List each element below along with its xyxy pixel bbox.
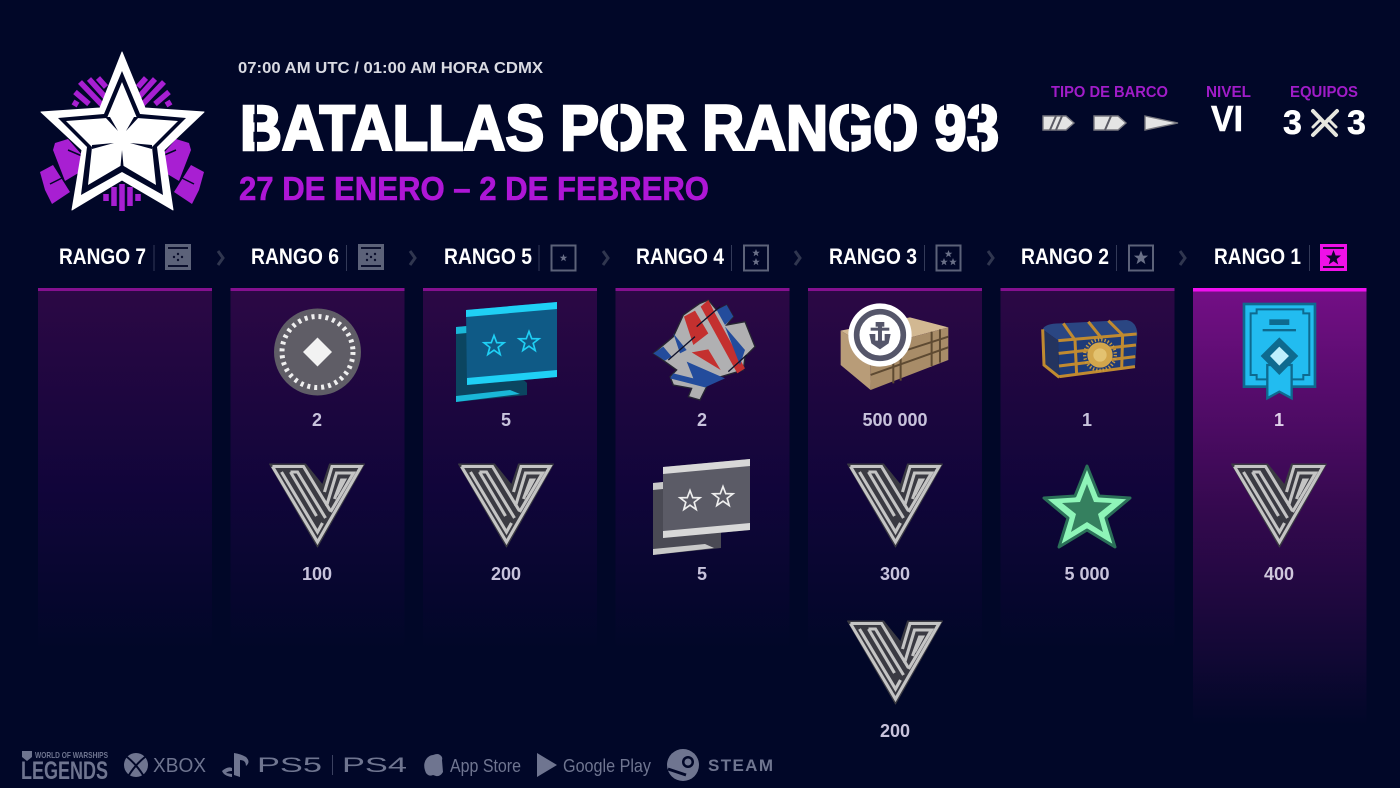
heading: rango 5: RANGO 5 <box>444 244 532 269</box>
icon: blue flag rank 5 <box>456 302 557 402</box>
value: tier VI: VI <box>1211 98 1243 139</box>
icon: credits crate rank 3 <box>841 303 948 390</box>
heading: rango 1: RANGO 1 <box>1214 244 1301 269</box>
icon: cruiser class <box>1094 116 1126 130</box>
value: 5: 5 <box>697 564 707 584</box>
value: 300: 300 <box>880 564 910 584</box>
footer: google play logo: Google Play <box>563 756 651 776</box>
arrow: rango 3 to 2 <box>988 251 993 265</box>
label: equipos: EQUIPOS <box>1290 84 1358 101</box>
heading: rango 3: RANGO 3 <box>829 244 917 269</box>
title: BATALLAS POR RANGO 93 <box>240 92 999 164</box>
footer: app store logo: App Store <box>450 756 521 776</box>
arrow: rango 2 to 1 <box>1180 251 1185 265</box>
icon: certificate rank 1 <box>1244 304 1315 398</box>
panel: rango 2 column <box>1000 288 1174 650</box>
footer: app store logo <box>424 754 521 776</box>
value: 1: 1 <box>1082 410 1092 430</box>
panel: rango 4 column <box>616 288 790 650</box>
icon: star emblem logo <box>40 52 204 211</box>
footer: google play logo <box>537 753 651 777</box>
subtitle: dates: 27 DE ENERO – 2 DE FEBRERO <box>239 170 709 207</box>
heading: rango 4: RANGO 4 <box>636 244 725 269</box>
icon: vee points rank 3 second <box>848 621 942 704</box>
value: 5 000: 5 000 <box>1064 564 1110 584</box>
panel: rango 1 column <box>1193 288 1366 725</box>
footer: legends logo: LEGENDS <box>21 757 108 785</box>
arrow: rango 7 to 6 <box>218 251 223 265</box>
value: 5: 5 <box>501 410 511 430</box>
heading: rango 7: RANGO 7 <box>59 244 146 269</box>
icon: vee points rank 3 <box>848 464 942 547</box>
icon: grey flag rank 4 <box>653 459 750 555</box>
footer: legends logo: WORLD OF WARSHIPS <box>35 750 108 760</box>
icon: green star rank 2 <box>1044 466 1130 547</box>
heading: rango 2: RANGO 2 <box>1021 244 1109 269</box>
value: 1: 1 <box>1274 410 1284 430</box>
value: 200: 200 <box>880 721 910 741</box>
value: 2: 2 <box>697 410 707 430</box>
footer: xbox logo: XBOX <box>153 755 206 777</box>
arrow: rango 4 to 3 <box>795 251 800 265</box>
label: tipo de barco: TIPO DE BARCO <box>1051 84 1168 101</box>
value: teams 3 vs 3: 3 <box>1347 104 1366 142</box>
panel: rango 7 column <box>38 288 212 650</box>
value: 400: 400 <box>1264 564 1294 584</box>
panel: rango 6 column <box>230 288 404 650</box>
icon: vee points rank 5 <box>458 464 554 547</box>
heading: rango 6: RANGO 6 <box>251 244 339 269</box>
panel: rango 5 column <box>423 288 597 650</box>
icon: signal coin rank 6 <box>274 308 361 396</box>
heading: rango 1 <box>1214 244 1347 271</box>
value: teams 3 vs 3: 3 <box>1283 104 1302 142</box>
text: schedule: 07:00 AM UTC / 01:00 AM HORA CDMX <box>238 60 544 77</box>
icon: vee points rank 6 <box>270 464 364 547</box>
value: 2: 2 <box>312 410 322 430</box>
icon: battleship class <box>1145 116 1178 130</box>
footer: xbox logo <box>124 753 206 777</box>
value: 200: 200 <box>491 564 521 584</box>
label: nivel: NIVEL <box>1206 84 1251 101</box>
arrow: rango 6 to 5 <box>410 251 415 265</box>
icon: camouflage rank 4 <box>653 300 755 400</box>
arrow: rango 5 to 4 <box>603 251 608 265</box>
icon: treasure chest rank 2 <box>1043 320 1137 377</box>
icon: vee points rank 1 <box>1232 464 1326 547</box>
footer: steam logo <box>667 749 773 781</box>
value: teams 3 vs 3 <box>1283 104 1366 142</box>
footer: playstation logos: PS5 <box>257 754 322 777</box>
value: 500 000: 500 000 <box>862 410 928 430</box>
heading: rango 6 <box>251 244 384 271</box>
footer: steam logo: STEAM <box>708 756 773 775</box>
panel: rango 3 column <box>808 288 982 650</box>
footer: playstation logos <box>222 753 408 777</box>
footer: legends logo <box>21 750 108 785</box>
footer: playstation logos: PS4 <box>342 754 408 777</box>
icon: destroyer class <box>1043 116 1074 130</box>
value: 100: 100 <box>302 564 332 584</box>
